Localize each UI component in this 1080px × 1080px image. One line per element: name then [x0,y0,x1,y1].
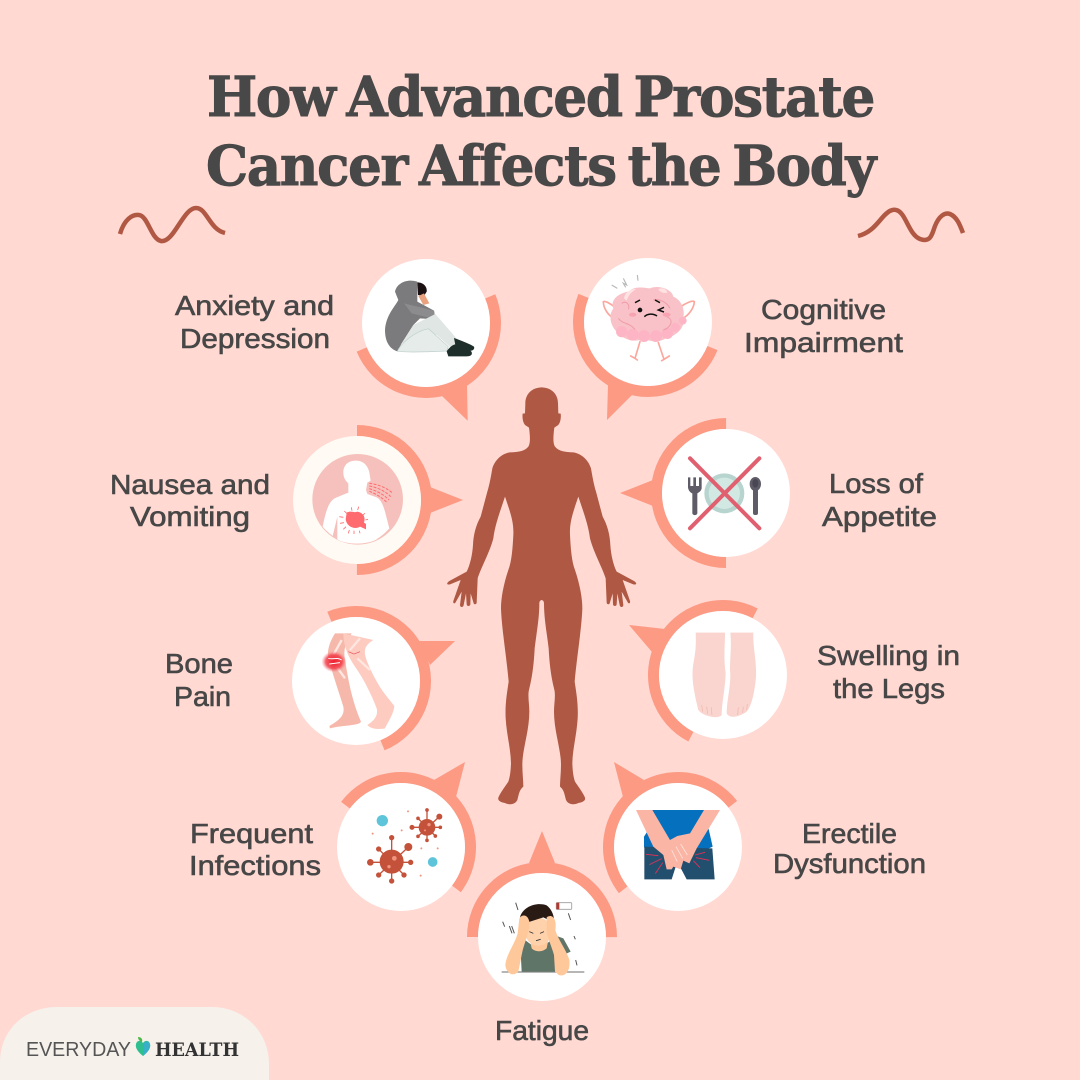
panel: cognitive impairment [558,232,903,420]
label: Depression [180,323,330,354]
logo panel [0,1007,269,1080]
callout pointer [629,625,665,652]
callout ring [629,581,817,769]
callout ring [472,868,612,1006]
icon disc [362,259,490,387]
callout pointer [419,641,455,665]
squiggle right [858,210,963,240]
title [206,64,878,198]
label: Swelling in [817,640,960,671]
label [817,640,960,704]
callout ring [304,750,498,944]
panel: swelling in the legs [629,581,960,769]
icon disc [659,611,787,739]
label: Frequent [190,818,313,849]
icon disc [293,436,421,564]
label: Dysfunction [773,848,926,879]
label: Nausea and [110,469,270,500]
label [822,468,937,532]
panel: bone pain [165,590,455,772]
icon: painful legs [321,633,394,729]
callout pointer [614,762,644,797]
icon: torso with stomach [312,454,403,545]
panel: frequent infections [189,750,498,944]
label: Pain [174,681,231,712]
panel: anxiety and depression [175,232,517,421]
label: Anxiety and [175,290,334,321]
icon: exhausted person [502,903,584,975]
label [175,290,334,354]
icon disc [614,783,742,911]
label: the Legs [833,673,945,704]
label: Vomiting [130,501,250,532]
label: Bone [165,648,233,679]
label: Appetite [822,501,937,532]
icon: swollen feet [693,633,756,717]
label [165,648,233,712]
label [773,818,926,879]
icon disc [662,429,790,557]
label: Infections [189,850,321,881]
callout ring [335,232,517,414]
title: Cancer Affects the Body [206,133,878,198]
squiggle left [120,208,225,241]
logo wordmark: health: HEALTH [155,1039,239,1061]
callout ring [265,590,447,772]
label: Cognitive [761,294,886,325]
panel: fatigue [472,831,612,1046]
icon disc [292,617,420,745]
icon disc [478,873,606,1001]
body silhouette [447,387,636,804]
icon: worried brain [603,275,694,361]
label: Impairment [744,327,903,358]
callout pointer [607,385,632,420]
label: Fatigue [495,1015,589,1046]
title: How Advanced Prostate [207,64,874,129]
callout pointer [430,487,463,513]
label [189,818,321,881]
label [744,294,903,358]
logo background [0,1007,269,1080]
callout pointer [529,831,555,863]
logo icon: heart apple [136,1037,150,1056]
logo wordmark: everyday: EVERYDAY [26,1039,131,1061]
callout ring [558,232,738,412]
callout ring [288,430,426,570]
label: Loss of [829,468,923,499]
label [110,469,270,532]
icon disc [584,258,712,386]
callout ring [580,749,776,945]
icon disc [337,783,465,911]
panel: loss of appetite [620,424,937,562]
icon: crossed out plate [688,458,761,528]
callout pointer [434,762,465,797]
icon: hands over groin [636,810,720,879]
panel: erectile dysfunction [580,749,926,945]
callout pointer [620,480,653,506]
label: Erectile [802,818,897,849]
callout pointer [442,385,468,421]
icon: viruses [368,809,442,883]
icon: seated person [385,281,474,356]
callout ring [656,424,796,562]
panel: nausea and vomiting [110,430,463,570]
